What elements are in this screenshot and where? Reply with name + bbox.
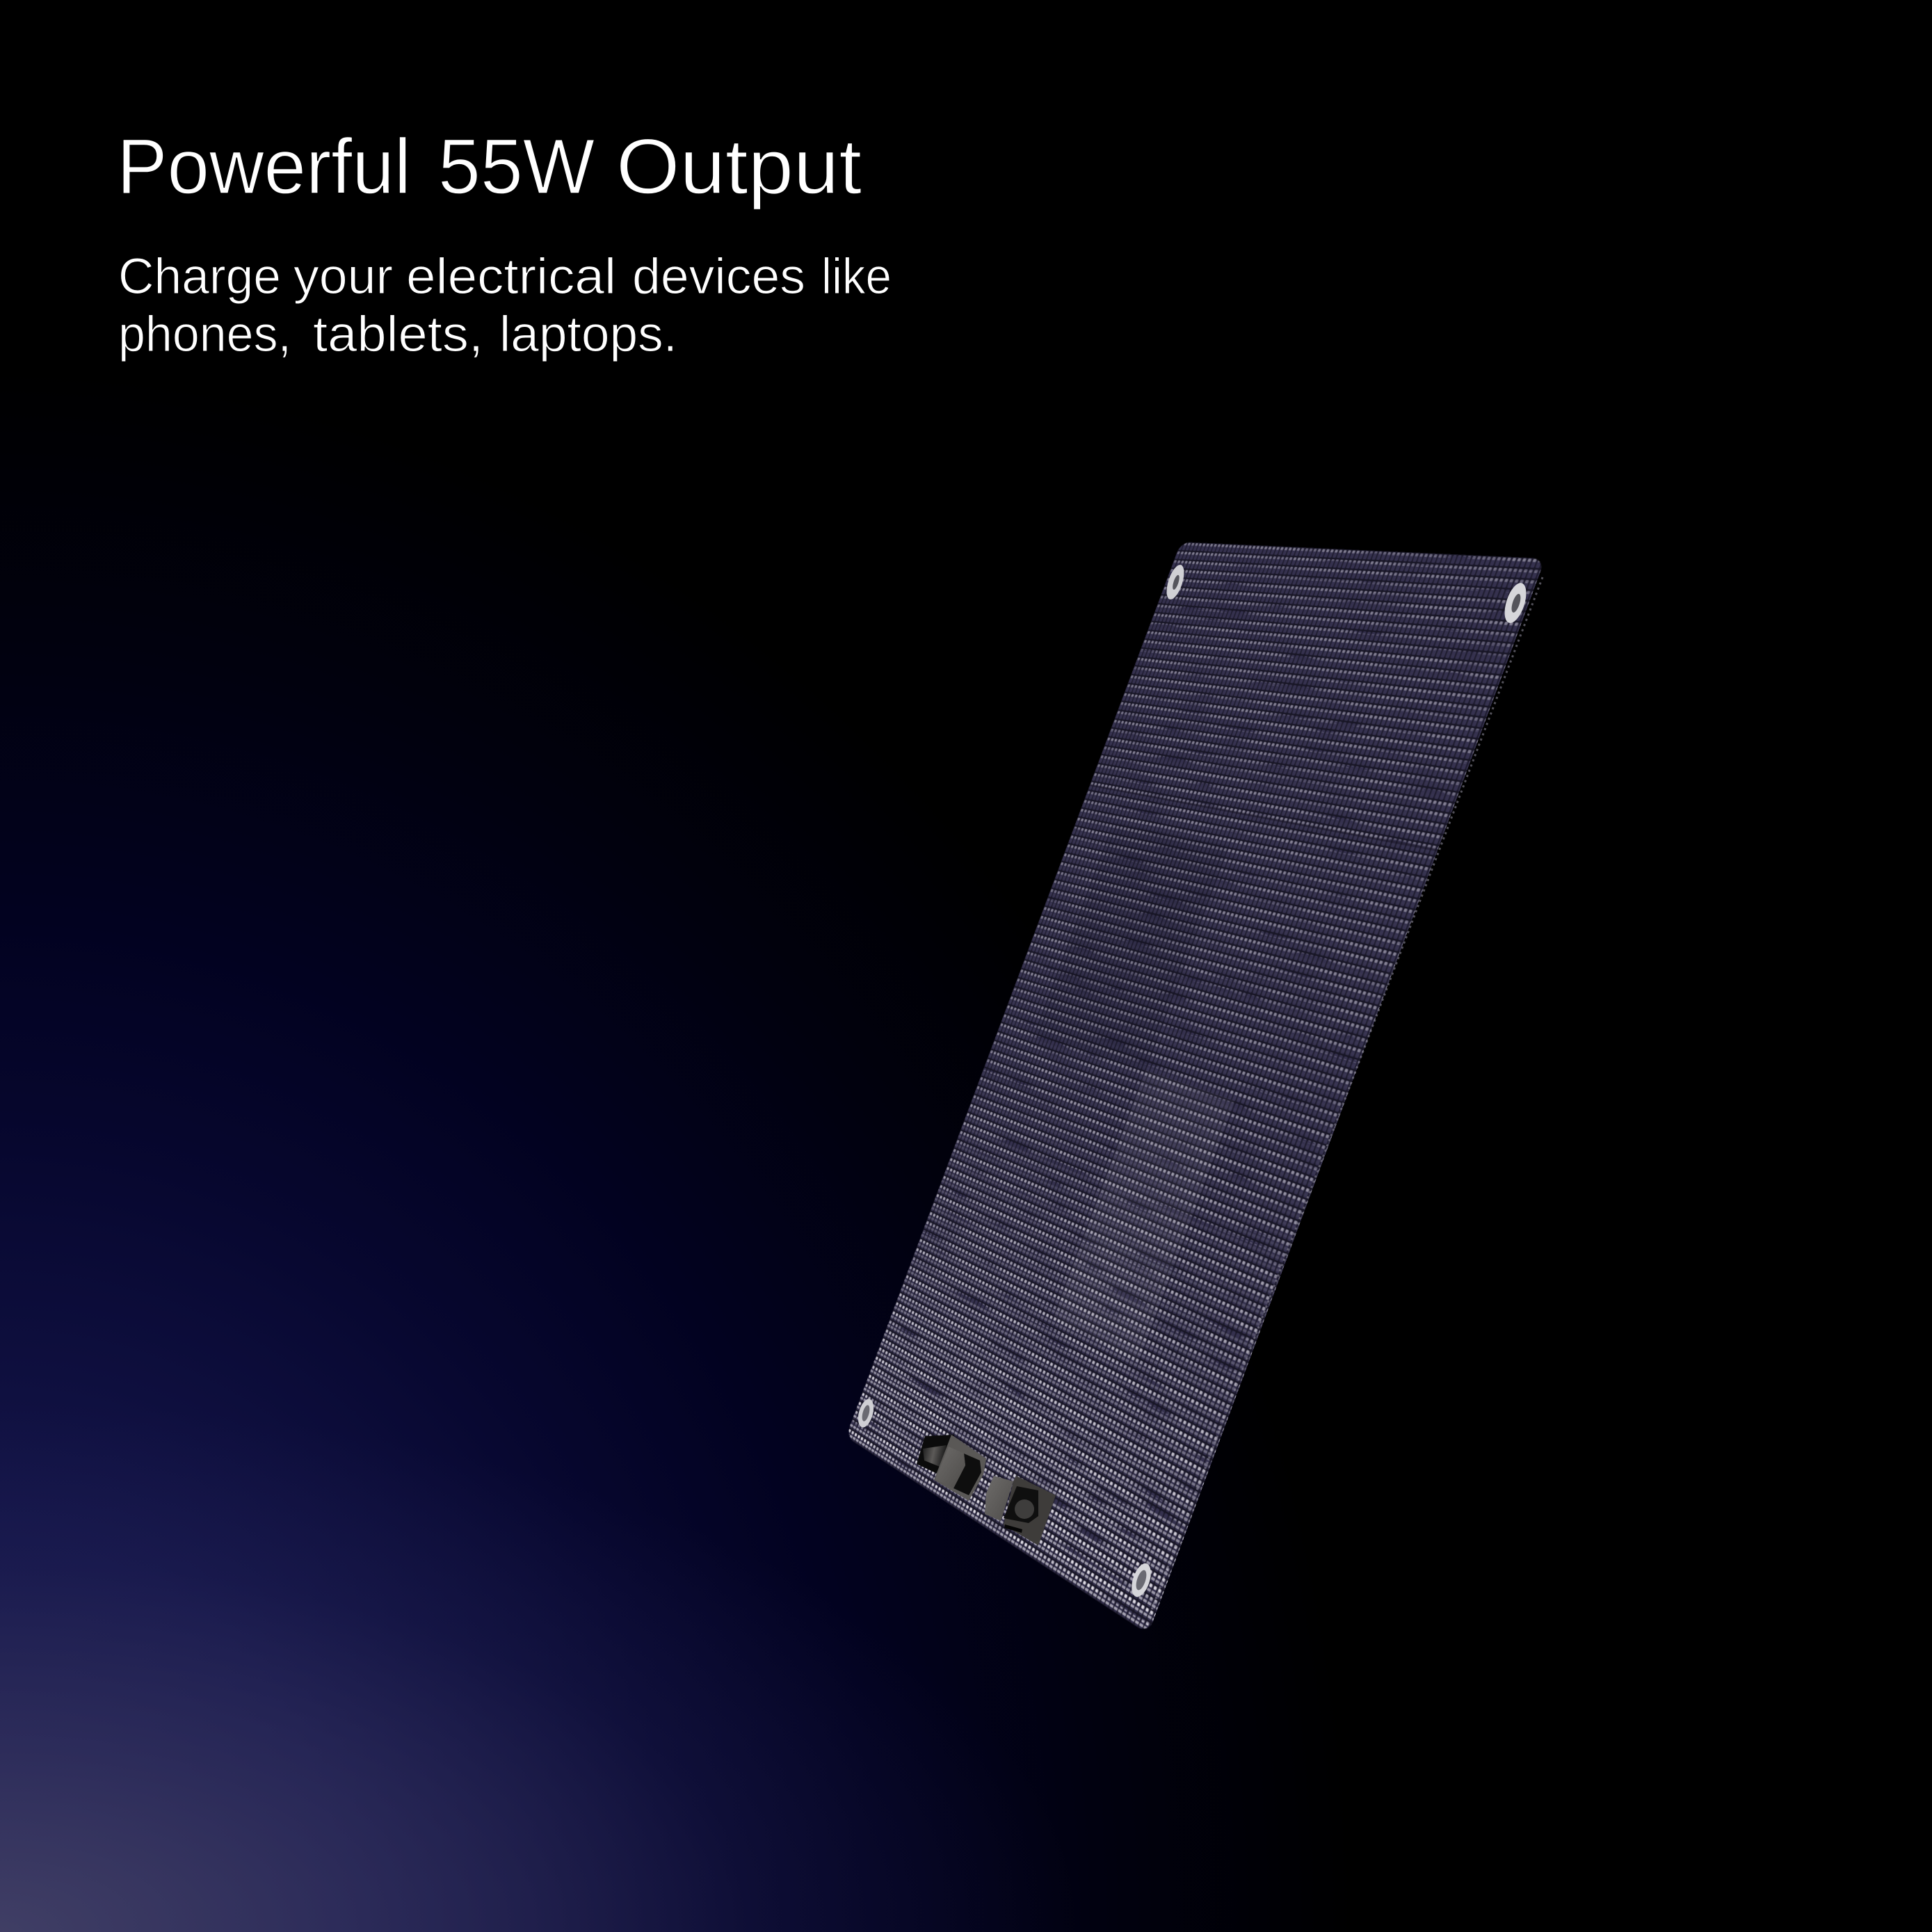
icon: grommet top right bbox=[1500, 580, 1531, 626]
description text: electrical bbox=[406, 249, 616, 305]
right connector bbox=[985, 1476, 1056, 1545]
title: 55W bbox=[438, 123, 595, 210]
icon: grommet bottom right bbox=[1128, 1561, 1154, 1599]
icon: grommet top left bbox=[1163, 563, 1188, 602]
description text: like bbox=[821, 249, 892, 305]
description text: your bbox=[293, 249, 393, 305]
panel right edge bbox=[1149, 577, 1543, 1617]
title: Output bbox=[616, 123, 862, 210]
description text: phones, bbox=[118, 307, 291, 362]
description text: laptops. bbox=[499, 307, 677, 362]
icon: grommet bottom left bbox=[855, 1397, 876, 1429]
description text: devices bbox=[632, 249, 805, 305]
solar panel surface bbox=[848, 542, 1543, 1629]
description text bbox=[118, 249, 892, 362]
description text: Charge bbox=[118, 249, 281, 305]
left connector bbox=[917, 1435, 986, 1501]
description text: tablets, bbox=[313, 307, 483, 362]
title: Powerful bbox=[117, 123, 411, 210]
